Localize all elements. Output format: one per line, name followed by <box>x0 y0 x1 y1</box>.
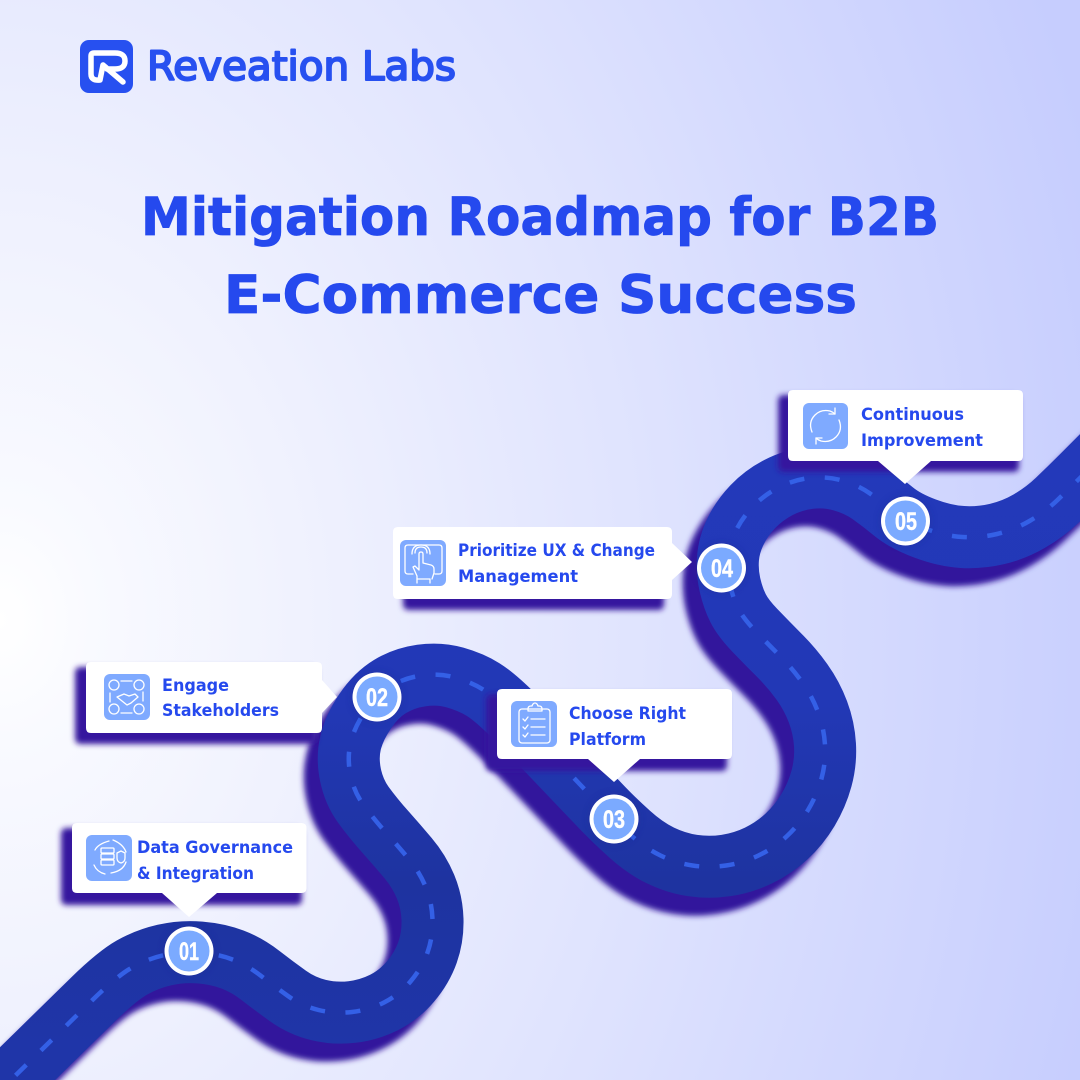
label 01: Data Governance <box>137 838 293 858</box>
marker 03 <box>590 794 638 844</box>
step 04 <box>393 527 746 610</box>
road shadow <box>0 446 1080 1080</box>
card shadow 04 <box>403 545 664 610</box>
label 05 <box>861 405 983 451</box>
card 02 <box>86 662 337 733</box>
card shadow 03 <box>486 694 727 771</box>
label 02: Stakeholders <box>162 701 279 721</box>
icon: touch screen hand <box>400 540 446 586</box>
marker 01 <box>164 926 214 976</box>
label 01: & Integration <box>137 864 254 884</box>
label 05: Improvement <box>861 431 983 451</box>
marker 05 <box>881 496 930 546</box>
step 05 <box>778 390 1023 546</box>
step 01 <box>61 823 306 976</box>
title: E-Commerce Success <box>224 265 857 326</box>
icon: checklist clipboard <box>511 701 557 747</box>
label 02: Engage <box>162 676 229 696</box>
icon: handshake stakeholders <box>104 674 150 720</box>
label 04: Prioritize UX & Change <box>458 541 655 561</box>
marker 04 <box>697 544 746 592</box>
road centre dashes <box>0 428 1080 1080</box>
label 05: Continuous <box>861 405 964 425</box>
icon: data governance <box>86 835 132 881</box>
card shadow 01 <box>61 828 302 905</box>
label 02 <box>162 676 279 721</box>
title <box>141 187 939 326</box>
marker 03: 03 <box>603 806 625 834</box>
step 02 <box>75 662 402 744</box>
marker 02 <box>352 672 402 722</box>
marker 02: 02 <box>366 684 388 712</box>
logo mark <box>80 40 133 93</box>
step 03 <box>486 689 732 844</box>
label 03: Choose Right <box>569 704 686 724</box>
card 03 <box>497 689 732 782</box>
card shadow 02 <box>75 667 317 744</box>
card 05 <box>788 390 1023 484</box>
title: Mitigation Roadmap for B2B <box>141 187 939 248</box>
card shadow 05 <box>778 395 1019 472</box>
logo <box>80 40 456 93</box>
road surface <box>0 428 1080 1080</box>
label 04: Management <box>458 567 578 587</box>
label 01 <box>137 838 293 884</box>
label 03 <box>569 704 686 750</box>
icon: refresh cycle <box>803 403 848 449</box>
card 04 <box>393 527 692 599</box>
label 04 <box>458 541 655 587</box>
logo wordmark: Reveation Labs <box>147 44 456 90</box>
label 03: Platform <box>569 730 646 750</box>
card 01 <box>72 823 306 917</box>
marker 04: 04 <box>711 555 733 583</box>
marker 05: 05 <box>895 508 917 536</box>
marker 01: 01 <box>179 938 199 966</box>
road <box>0 428 1080 1080</box>
